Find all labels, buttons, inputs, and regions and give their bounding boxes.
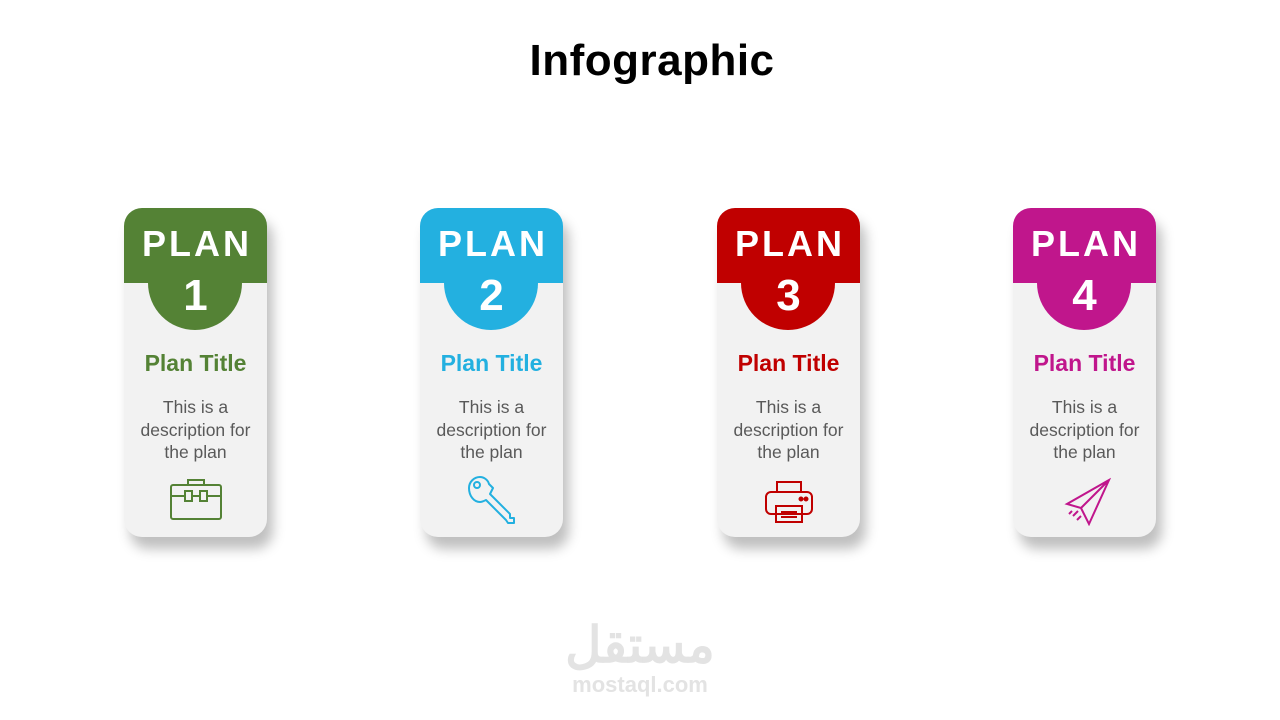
description: This is a (459, 397, 524, 417)
description: description for (734, 420, 843, 440)
description: This is a (1052, 397, 1117, 417)
header: plan 4 (1013, 208, 1156, 283)
header: plan 2 (420, 208, 563, 283)
icon: paper plane (1064, 478, 1111, 526)
number 2: 2 (479, 271, 504, 320)
description (141, 397, 250, 462)
watermark: mostaql.com (572, 672, 708, 697)
description: the plan (757, 442, 820, 462)
description: This is a (756, 397, 821, 417)
description: description for (141, 420, 250, 440)
label: PLAN: PLAN (735, 223, 845, 264)
label: PLAN: PLAN (438, 223, 548, 264)
plan title: Plan Title (738, 350, 839, 376)
description (437, 397, 546, 462)
tab: plan 1 (148, 268, 242, 330)
description: the plan (164, 442, 227, 462)
description (734, 397, 844, 462)
panel: plan 2 (420, 208, 563, 537)
description: the plan (460, 442, 523, 462)
tab: plan 2 (444, 268, 538, 330)
title: Infographic (529, 36, 775, 85)
label: PLAN: PLAN (1031, 223, 1141, 264)
header: plan 1 (124, 208, 267, 283)
icon: toolbox (170, 479, 222, 520)
plan title: Plan Title (1034, 350, 1135, 376)
watermark: مستقل (565, 617, 715, 673)
number 1: 1 (183, 271, 208, 320)
description: the plan (1053, 442, 1116, 462)
header: plan 3 (717, 208, 860, 283)
plan title: Plan Title (441, 350, 542, 376)
plan title: Plan Title (145, 350, 246, 376)
number 4: 4 (1072, 271, 1097, 320)
panel: plan 3 (717, 208, 860, 537)
description: description for (1030, 420, 1139, 440)
panel: plan 4 (1013, 208, 1156, 537)
description: description for (437, 420, 546, 440)
tab: plan 4 (1037, 268, 1131, 330)
description: This is a (163, 397, 228, 417)
number 3: 3 (776, 271, 801, 320)
label: PLAN: PLAN (142, 223, 252, 264)
tab: plan 3 (741, 268, 835, 330)
panel: plan 1 (124, 208, 267, 537)
icon: printer (765, 481, 813, 523)
icon: key (468, 476, 515, 524)
description (1030, 397, 1140, 462)
